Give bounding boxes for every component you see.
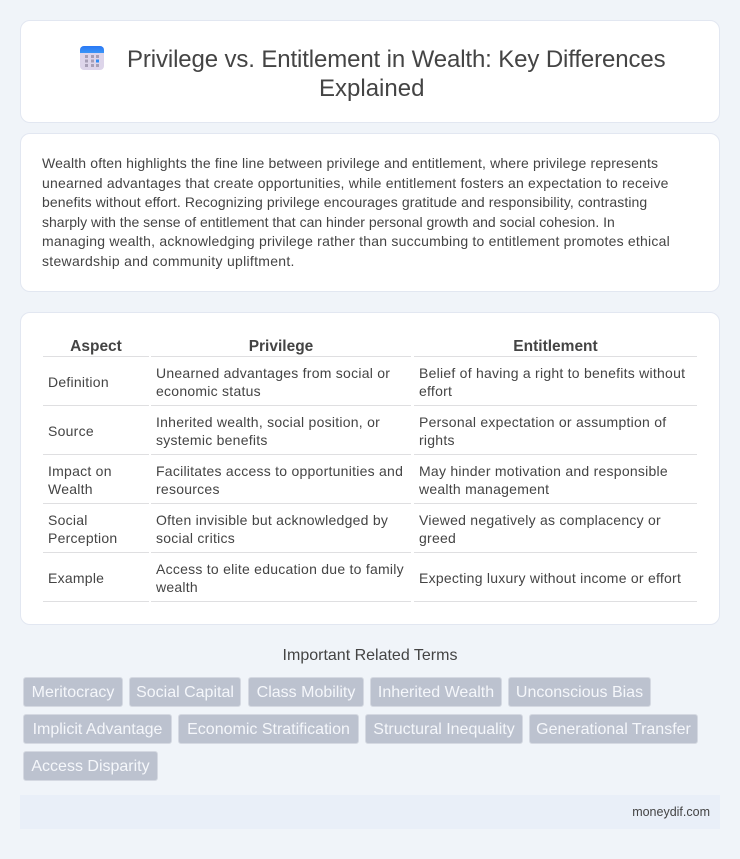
heading: important related terms: Important Related Terms [283, 647, 457, 664]
footer [20, 795, 720, 829]
tag list: Social Capital [136, 684, 234, 701]
table rows: Belief of having a right to benefits without [419, 365, 685, 381]
table header: Entitlement [513, 338, 598, 355]
table rows: economic status [156, 383, 261, 399]
title [127, 46, 665, 102]
tag list: Inherited Wealth [378, 684, 494, 701]
text block: introduction [42, 155, 670, 269]
title: Privilege vs. Entitlement in Wealth: Key Differences [127, 46, 665, 73]
text block: introduction: managing wealth, acknowledging privilege rather than succumbing to entitlement promotes ethical [42, 233, 670, 249]
table rows: Social [48, 512, 88, 528]
table rows: greed [419, 530, 456, 546]
icon: calendar [80, 46, 104, 70]
table rows: Personal expectation or assumption of [419, 414, 666, 430]
table rows: Often invisible but acknowledged by [156, 512, 388, 528]
panel: header [20, 20, 720, 123]
table rows: Wealth [48, 481, 93, 497]
table rows: Inherited wealth, social position, or [156, 414, 380, 430]
text block: introduction: stewardship and community upliftment. [42, 252, 295, 268]
tag list: Structural Inequality [373, 721, 515, 738]
panel: introduction [20, 133, 720, 292]
table rows: Unearned advantages from social or [156, 365, 390, 381]
table rows: Perception [48, 530, 117, 546]
table header: Privilege [249, 338, 313, 355]
table rows: rights [419, 432, 455, 448]
table rows: wealth management [419, 481, 549, 497]
table rows: Example [48, 570, 104, 586]
table header: Aspect [70, 338, 122, 355]
table rows: effort [419, 383, 452, 399]
table rows: Expecting luxury without income or effort [419, 570, 681, 586]
table rows: Impact on [48, 463, 112, 479]
tag list: Class Mobility [257, 684, 355, 701]
text block: introduction: sharply with the sense of entitlement that can hinder personal growth and social cohesion. In [42, 214, 615, 230]
tag list [23, 677, 698, 781]
table rows: Facilitates access to opportunities and [156, 463, 403, 479]
title: Explained [319, 75, 424, 102]
tag list: Access Disparity [31, 758, 150, 775]
tag list: Meritocracy [32, 684, 114, 701]
table rows [43, 356, 697, 602]
text block: introduction: Wealth often highlights the fine line between privilege and entitlement, where privilege represents [42, 155, 658, 171]
table rows: social critics [156, 530, 235, 546]
text block: introduction: benefits without effort. Recognizing privilege encourages gratitude and responsibility, contrasting [42, 194, 647, 210]
table header [70, 338, 598, 355]
panel: comparison table [20, 312, 720, 625]
table rows: Access to elite education due to family [156, 561, 404, 577]
text block: introduction: unearned advantages that create opportunities, while entitlement fosters an expectation to receive [42, 174, 669, 190]
table rows: resources [156, 481, 220, 497]
table rows: Viewed negatively as complacency or [419, 512, 661, 528]
table rows: Definition [48, 374, 109, 390]
tag list: Unconscious Bias [516, 684, 643, 701]
table rows: systemic benefits [156, 432, 268, 448]
table rows: May hinder motivation and responsible [419, 463, 668, 479]
tag list: Implicit Advantage [33, 721, 162, 738]
table rows: Source [48, 423, 94, 439]
tag list: Economic Stratification [187, 721, 350, 738]
table rows: wealth [156, 579, 198, 595]
tag list: Generational Transfer [536, 721, 691, 738]
footer credit: moneydif.com [632, 805, 710, 819]
